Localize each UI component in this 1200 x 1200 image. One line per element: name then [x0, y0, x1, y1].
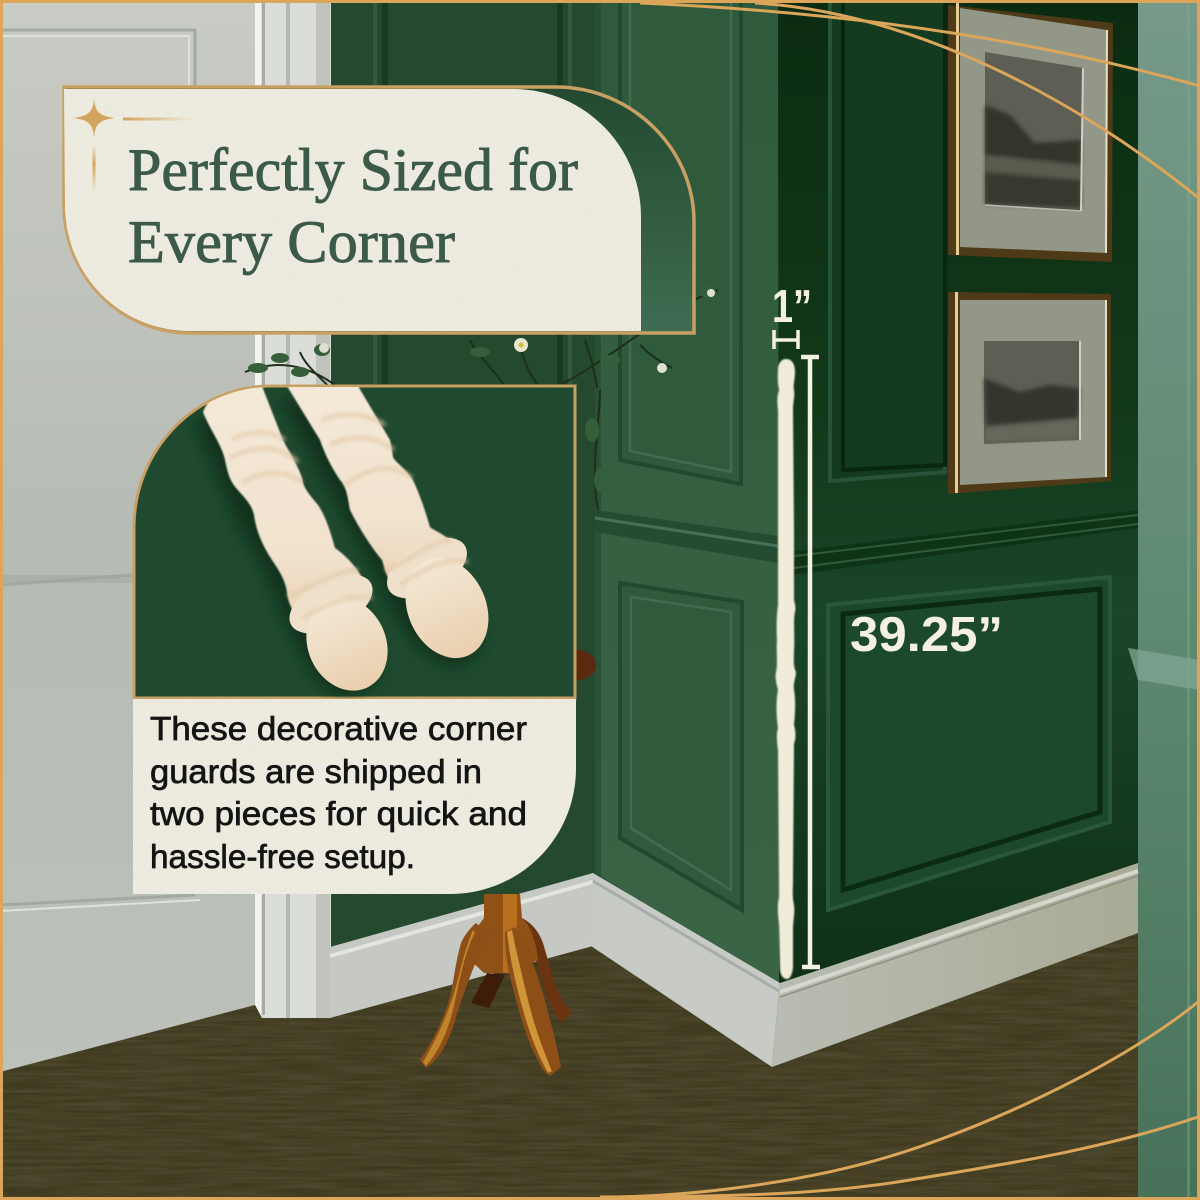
door frame: [255, 0, 331, 1020]
caption card: [133, 699, 576, 894]
title card cream fill: [64, 89, 641, 331]
caption text: guards are shipped in: [150, 753, 482, 790]
stool left leg: [420, 923, 489, 1068]
caption text: two pieces for quick and: [150, 795, 527, 832]
stool post and shoulders: [468, 894, 538, 973]
right wall strip: [1128, 0, 1200, 1200]
title heading: Every Corner: [128, 209, 455, 275]
right wall: [778, 0, 1138, 985]
width bracket: [774, 330, 798, 349]
wooden spindle close-ups: [195, 386, 504, 704]
title heading: Perfectly Sized for: [128, 137, 578, 203]
width dimension: 1 inch: [772, 280, 812, 349]
caption text: hassle-free setup.: [150, 838, 415, 875]
stool back legs: [471, 973, 505, 1008]
framed picture: lower: [948, 292, 1111, 494]
icon: gold sparkle with rules: [73, 98, 193, 192]
height dimension: 39.25 inches: [801, 357, 1003, 967]
skirting boards: [330, 863, 1138, 1067]
door: [0, 0, 256, 1080]
product photo panel: [134, 386, 575, 704]
wooden stool: [420, 650, 596, 1076]
height bracket: [801, 357, 820, 967]
height label: 39.25”: [850, 608, 1003, 662]
title card: [64, 87, 694, 333]
stool right leg: [505, 927, 561, 1076]
plant sprigs: [245, 286, 718, 510]
centre wall: [595, 0, 779, 985]
width label: 1”: [772, 280, 812, 332]
title card gold outline: [64, 87, 694, 333]
panel: product close-up and caption: [133, 386, 576, 894]
corner guard spindle: [776, 359, 796, 979]
framed picture: upper: [948, 0, 1113, 262]
caption text: These decorative corner: [150, 710, 527, 747]
floor: [0, 933, 1138, 1200]
left wall: [331, 0, 596, 960]
